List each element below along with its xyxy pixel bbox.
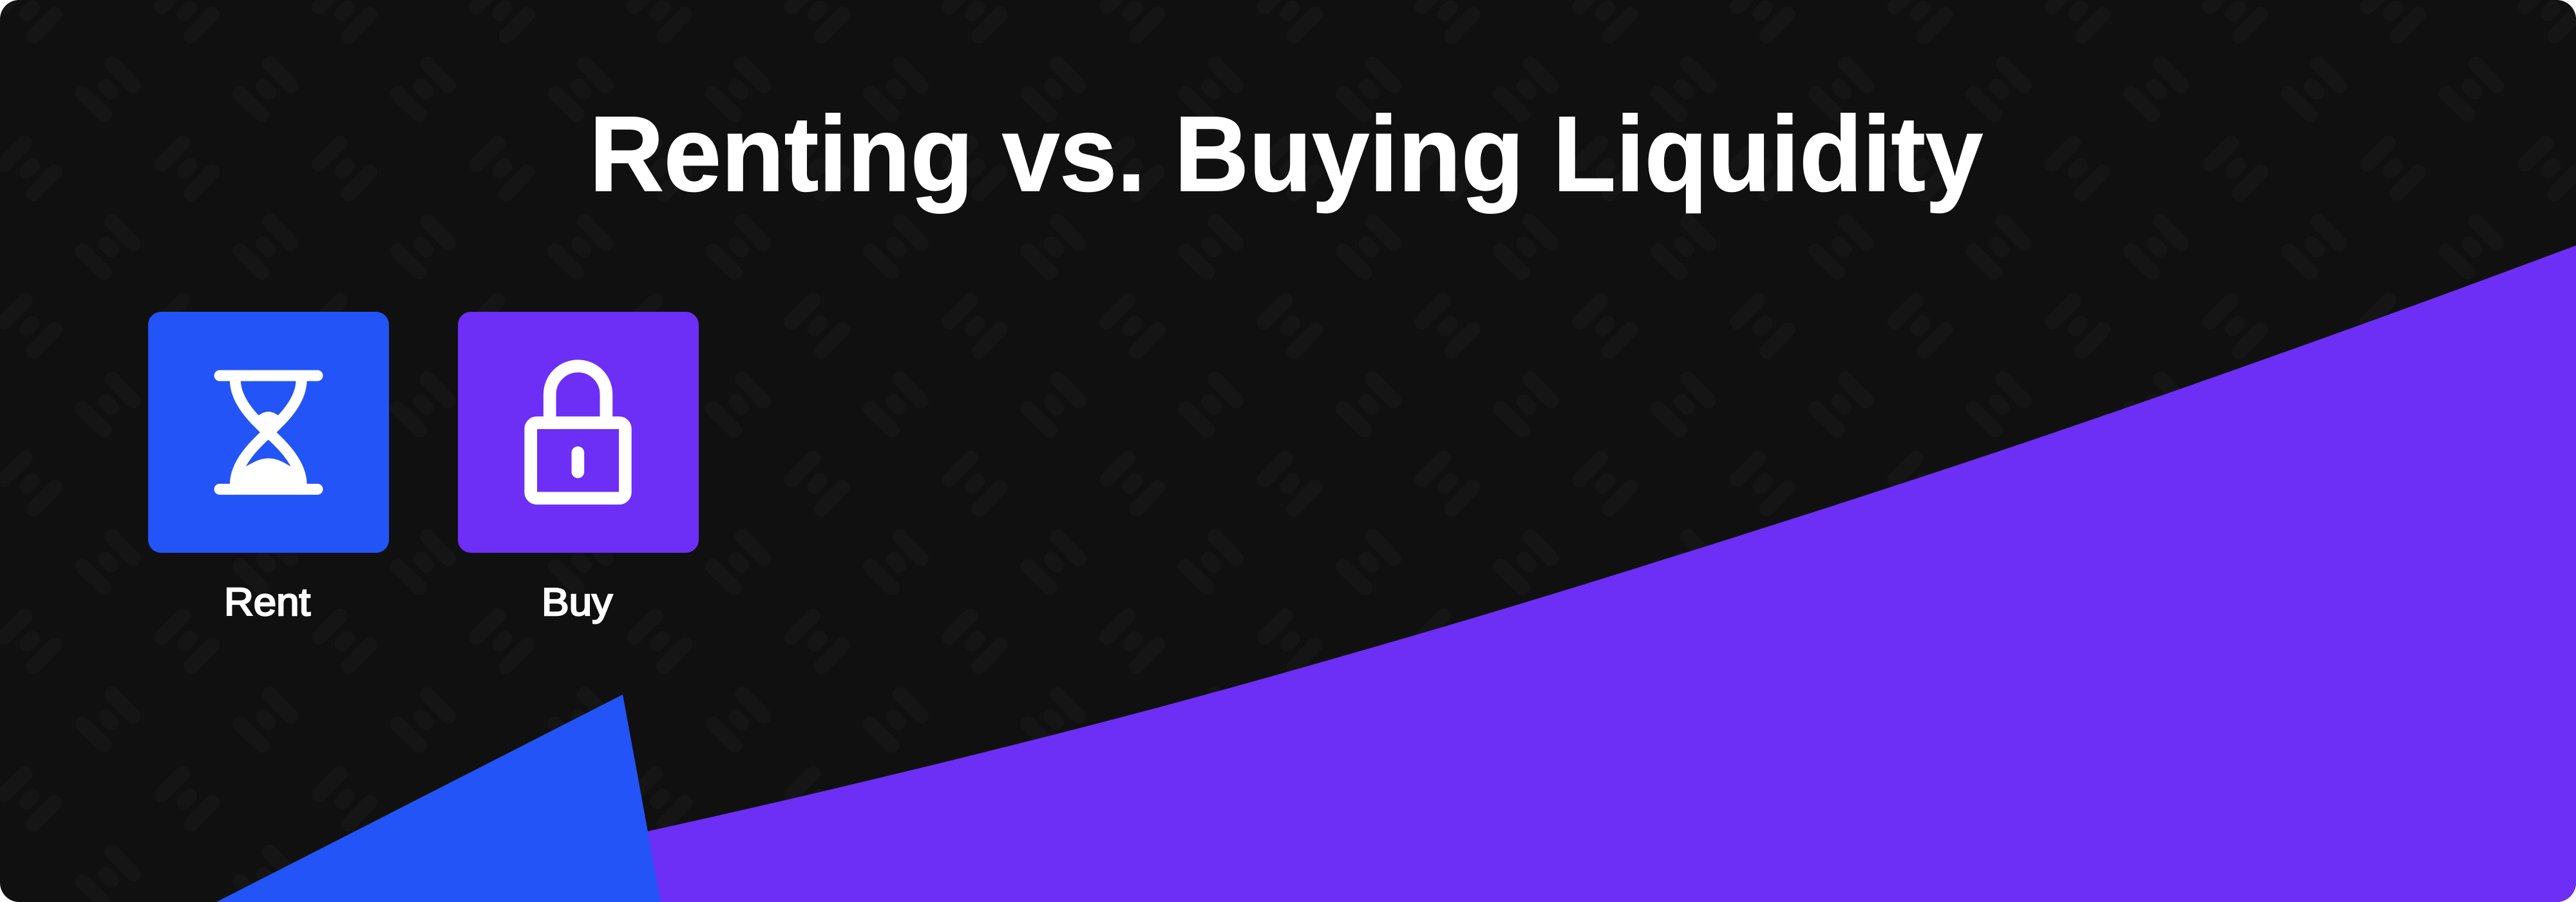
- title: Renting vs. Buying Liquidity: [589, 95, 1983, 214]
- legend: rent: [148, 312, 389, 624]
- rent icon tile: [148, 312, 389, 553]
- buy icon tile: [458, 312, 699, 553]
- blue rent area triangle: [216, 695, 661, 902]
- purple buy area curve: [644, 245, 2576, 902]
- legend: buy: [458, 312, 699, 624]
- icon: hourglass: [220, 376, 317, 489]
- label: rent: Rent: [224, 581, 310, 624]
- icon: padlock: [531, 366, 625, 498]
- label: buy: Buy: [542, 581, 612, 624]
